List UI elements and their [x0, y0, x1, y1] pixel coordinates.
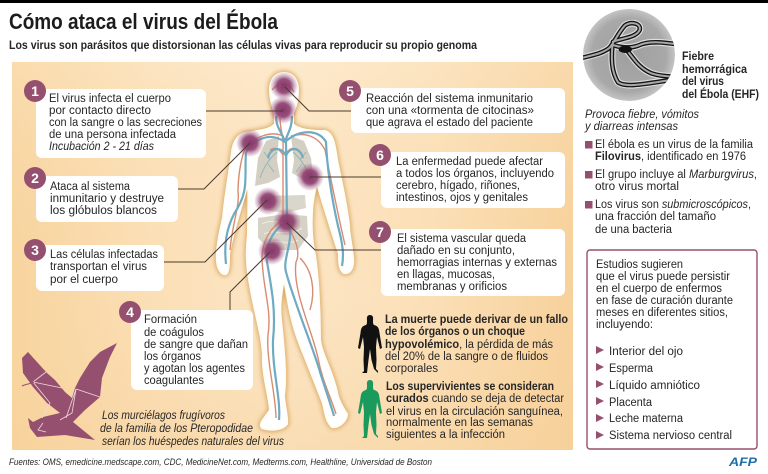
panel: persistence box [587, 250, 757, 449]
virus facts list: otro virus mortal [595, 181, 679, 193]
symptoms: y diarreas intensas [584, 121, 678, 133]
callout 3: transportan el virus [50, 261, 147, 273]
callout 4: Formación [144, 314, 197, 326]
panel: persistence box: meses en diferentes sitios, [596, 307, 728, 319]
organs: lungs [255, 136, 314, 186]
virus heading: hemorrágica [682, 64, 748, 76]
callout 2: los glóbulos blancos [50, 205, 157, 217]
callout 7 [369, 221, 565, 296]
death note: del 20% de la sangre o de fluidos [385, 351, 548, 363]
callout 4: coagulantes [144, 375, 204, 387]
callout 5: con una «tormenta de citocinas» [366, 105, 534, 117]
death note [385, 314, 568, 375]
callout 3: 3 [31, 242, 39, 258]
panel: persistence box: Estudios sugieren [596, 259, 683, 271]
callout 3 [24, 239, 164, 291]
callout 5: 5 [346, 83, 354, 99]
icon: black human figure [358, 315, 382, 373]
virus facts list: El ébola es un virus de la familia [595, 139, 754, 151]
callout 4: de coágulos [144, 327, 204, 339]
callout 7: hemorragias internas y externas [397, 257, 557, 269]
callout 4: y agotan los agentes [144, 363, 245, 375]
title: Cómo ataca el virus del Ébola [9, 9, 279, 34]
leader lines [164, 87, 381, 310]
sources: Fuentes: OMS, emedicine.medscape.com, CDC, MedicineNet.com, Medterms.com, Healthline, Universidad de Boston [9, 457, 432, 467]
virus facts list: de una bacteria [595, 224, 673, 236]
site list [596, 346, 732, 442]
callout 6: intestinos, ojos y genitales [396, 192, 528, 204]
callout 5 [339, 80, 565, 133]
callout 7: dañado en su conjunto, [397, 245, 515, 257]
callout 1: Incubación 2 - 21 días [49, 141, 154, 153]
survivors note: el virus en la circulación sanguínea, [386, 406, 563, 418]
site list: Placenta [609, 397, 653, 409]
callout 6: La enfermedad puede afectar [396, 156, 543, 168]
callout 4 [119, 301, 253, 390]
human body figure [217, 72, 353, 430]
callout 1 [24, 80, 206, 158]
callout 6: 6 [376, 147, 384, 163]
virus facts list: El grupo incluye al Marburgvirus, [595, 169, 757, 181]
callout 5: que agrava el estado del paciente [366, 117, 533, 129]
callout 5: Reacción del sistema inmunitario [366, 93, 533, 105]
blue veins [225, 116, 343, 420]
death note: corporales [385, 363, 438, 375]
callout 2: inmunitario y destruye [50, 193, 164, 205]
virus heading: del Ébola (EHF) [682, 88, 759, 101]
icon: fruit bat [22, 343, 117, 440]
bat caption: serían los huéspedes naturales del virus [102, 436, 284, 448]
top black bar [0, 0, 768, 3]
virus heading: Fiebre [682, 51, 714, 63]
site list: Sistema nervioso central [609, 430, 732, 442]
panel: persistence box: en fase de curación durante [596, 295, 733, 307]
callout 4: 4 [126, 304, 134, 320]
panel: body infographic background [12, 62, 573, 450]
callout 6 [369, 144, 565, 208]
callout 1: con la sangre o las secreciones [49, 117, 202, 129]
virus facts list: Los virus son submicroscópicos, [595, 199, 751, 211]
site list: Leche materna [609, 413, 684, 425]
infection spots [236, 72, 324, 265]
callout 6: cerebro, hígado, riñones, [396, 180, 520, 192]
callout 7: membranas y orificios [397, 281, 507, 293]
virus heading [682, 51, 759, 101]
AFP logo: AFP [728, 455, 758, 469]
callout 7: en llagas, mucosas, [397, 269, 495, 281]
callout 1: El virus infecta el cuerpo [49, 93, 171, 105]
callout 4: de sangre que dañan [144, 339, 248, 351]
callout 1: 1 [31, 83, 39, 99]
site list: Interior del ojo [609, 346, 683, 358]
survivors note: normalmente en las semanas [386, 417, 533, 429]
virus heading: del virus [682, 76, 724, 88]
symptoms [584, 109, 699, 133]
callout 7: El sistema vascular queda [397, 233, 527, 245]
callout 3: por el cuerpo [50, 274, 118, 286]
callout 1: por contacto directo [49, 105, 151, 117]
death note: La muerte puede derivar de un fallo [385, 314, 568, 326]
callout 2: Ataca al sistema [50, 181, 131, 193]
virus facts list: una fracción del tamaño [595, 211, 716, 223]
virus facts list [585, 139, 757, 236]
organs: liver and intestines [258, 195, 308, 250]
survivors note: Los supervivientes se consideran [386, 381, 554, 393]
callout 6: a todos los órganos, incluyendo [396, 168, 554, 180]
site list: Esperma [609, 363, 654, 375]
death note: de los órganos o un choque [385, 326, 525, 338]
site list: Líquido amniótico [609, 380, 700, 392]
callout 2: 2 [31, 170, 39, 186]
callout 4: los órganos [144, 351, 201, 363]
callout 3: Las células infectadas [50, 249, 158, 261]
callout 7: 7 [376, 224, 384, 240]
virus micrograph [583, 9, 678, 101]
bat caption: Los murciélagos frugívoros [102, 410, 225, 422]
survivors note [386, 381, 564, 441]
bat caption: de la familia de los Pteropodidae [100, 423, 253, 435]
icon: green human figure [358, 380, 382, 438]
panel: persistence box: incluyendo: [596, 319, 653, 331]
callout 1: de una persona infectada [49, 129, 177, 141]
survivors note: curados cuando se deja de detectar [386, 393, 564, 405]
red arteries [230, 84, 345, 418]
symptoms: Provoca fiebre, vómitos [585, 109, 699, 121]
subtitle: Los virus son parásitos que distorsionan las células vivas para reproducir su propio genoma [9, 38, 477, 52]
survivors note: siguientes a la infección [386, 429, 505, 441]
virus facts list: Filovirus, identificado en 1976 [595, 151, 746, 163]
death note: hypovolémico, la pérdida de más [385, 339, 553, 351]
callout 2 [24, 167, 178, 222]
bat caption [100, 410, 284, 448]
panel: persistence box: que el virus puede persistir [596, 271, 730, 283]
panel: persistence box: en el cuerpo de enfermos [596, 283, 722, 295]
